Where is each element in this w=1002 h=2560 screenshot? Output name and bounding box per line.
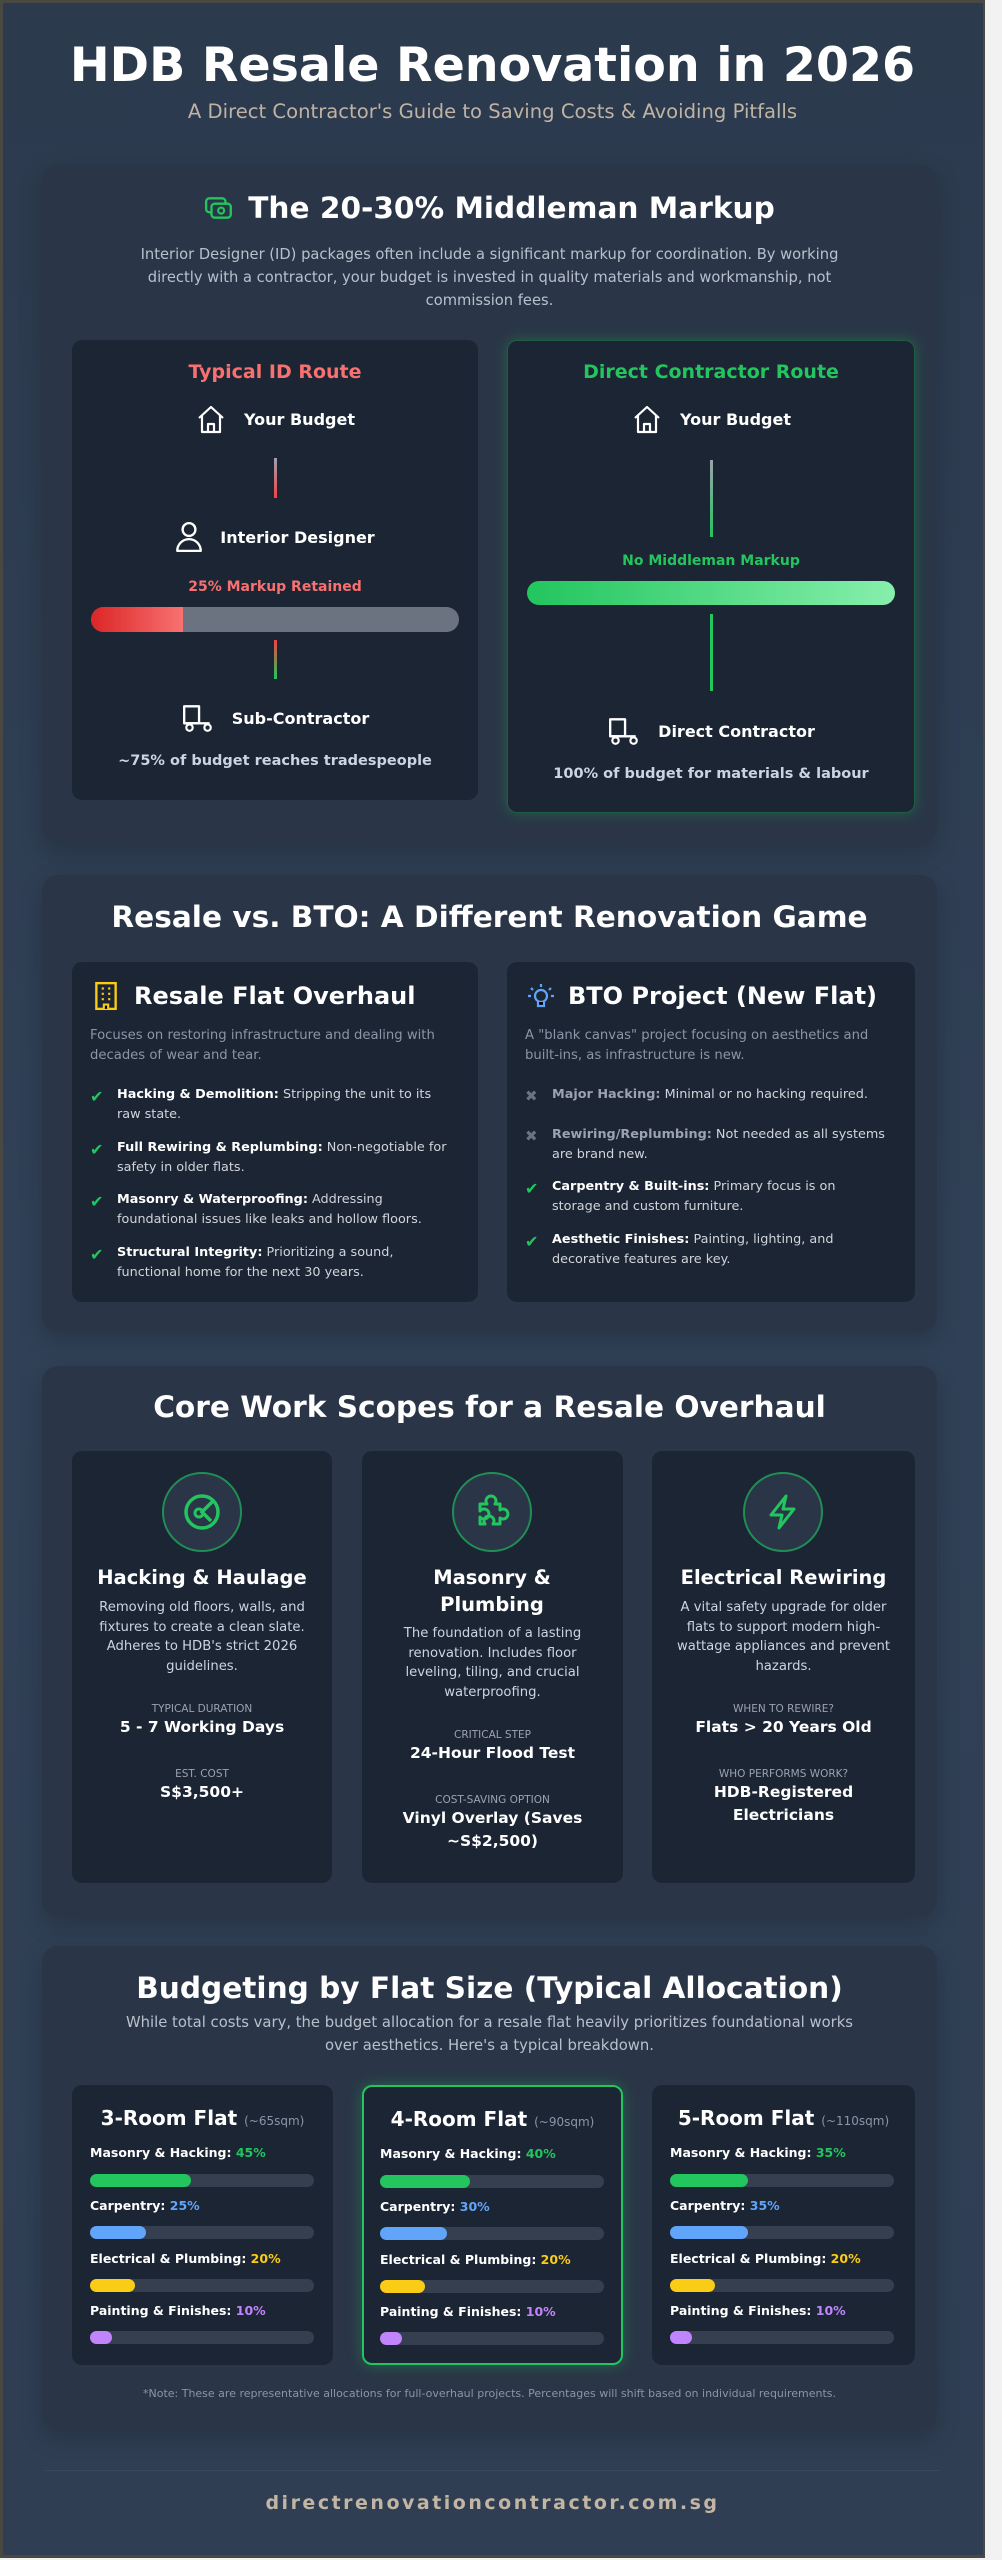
card: resale flat overhaul: ✔ — [90, 1087, 103, 1106]
item: Hacking & Demolition: Stripping the unit to its raw state. — [117, 1087, 431, 1122]
item: Full Rewiring & Replumbing: Non-negotiable for safety in older flats. — [117, 1140, 446, 1174]
stat: when: WHEN TO REWIRE? — [733, 1703, 834, 1715]
card title: Typical ID Route — [188, 361, 362, 383]
arrow line — [710, 614, 713, 691]
description: Interior Designer (ID) packages often include a significant markup for coordination. By working directly with a contractor, your budget is invested in quality materials and workmanship, not commission fees. — [141, 246, 838, 309]
note: 100% of budget for materials & labour — [553, 766, 869, 782]
card: BTO project: ✖ — [525, 1087, 538, 1105]
node: your budget: Your Budget — [244, 410, 355, 428]
node: direct contractor: Direct Contractor — [658, 722, 815, 740]
footer: directrenovationcontractor.com.sg — [265, 2492, 720, 2514]
node: your budget — [198, 406, 355, 434]
card heading: Hacking & Haulage — [97, 1566, 307, 1589]
item: Rewiring/Replumbing: Not needed as all systems are brand new. — [552, 1127, 885, 1162]
heading: Core Work Scopes for a Resale Overhaul — [153, 1390, 826, 1424]
stat: when: Flats > 20 Years Old — [695, 1718, 872, 1736]
full bar — [527, 581, 895, 605]
stat: cost-saving: COST-SAVING OPTION — [435, 1794, 550, 1806]
card title: 5-Room Flat (~110sqm) — [678, 2106, 889, 2130]
bar: electrical: Electrical & Plumbing: 20% — [670, 2251, 861, 2266]
arrow line — [710, 460, 713, 537]
stat: cost-saving: Vinyl Overlay (Saves ~S$2,500) — [403, 1809, 582, 1850]
description: While total costs vary, the budget allocation for a resale flat heavily prioritizes foundational works over aesthetics. Here's a typical breakdown. — [126, 2014, 853, 2054]
card: resale flat overhaul: ✔ — [90, 1192, 103, 1211]
stat: critical step: CRITICAL STEP — [454, 1729, 531, 1741]
node: direct contractor — [609, 718, 815, 745]
card: direct contractor route — [507, 340, 915, 813]
panel: budgeting by flat size — [42, 1946, 937, 2430]
node: sub-contractor: Sub-Contractor — [232, 708, 369, 728]
card description: The foundation of a lasting renovation. Includes floor leveling, tiling, and crucial waterproofing. — [404, 1626, 581, 1700]
subtitle: A Direct Contractor's Guide to Saving Costs & Avoiding Pitfalls — [188, 100, 797, 123]
panel: resale vs BTO — [42, 875, 937, 1332]
card: resale flat overhaul — [72, 962, 478, 1302]
bar: masonry: Masonry & Hacking: 35% — [670, 2145, 846, 2160]
card: BTO project: ✔ — [525, 1179, 538, 1198]
stat: duration — [120, 1703, 284, 1736]
stat: who: WHO PERFORMS WORK? — [719, 1768, 848, 1780]
card title: 4-Room Flat (~90sqm) — [391, 2107, 594, 2131]
card heading: Resale Flat Overhaul — [134, 982, 416, 1010]
item: Aesthetic Finishes: Painting, lighting, and decorative features are key. — [552, 1232, 833, 1266]
bar: electrical: Electrical & Plumbing: 20% — [90, 2251, 281, 2266]
bar: carpentry: Carpentry: 30% — [380, 2199, 490, 2214]
bar: painting: Painting & Finishes: 10% — [380, 2304, 556, 2319]
bar: carpentry: Carpentry: 25% — [90, 2198, 200, 2213]
icon: hacking — [162, 1472, 242, 1552]
card: 3-room — [72, 2085, 333, 2365]
icon: lightning — [743, 1472, 823, 1552]
stat: cost — [160, 1768, 244, 1801]
bar: electrical: Electrical & Plumbing: 20% — [380, 2252, 571, 2267]
bar: masonry: Masonry & Hacking: 40% — [380, 2146, 556, 2161]
card: 4-room (highlighted) — [362, 2085, 623, 2365]
heading: Resale vs. BTO: A Different Renovation Game — [111, 900, 868, 934]
stat: when — [695, 1703, 872, 1736]
card: BTO project — [507, 962, 915, 1302]
bar: masonry: Masonry & Hacking: 45% — [90, 2145, 266, 2160]
arrow line — [274, 640, 277, 679]
card: BTO project: ✔ — [525, 1232, 538, 1251]
card title: 3-Room Flat (~65sqm) — [101, 2106, 304, 2130]
card description: A vital safety upgrade for older flats to support modern high-wattage appliances and prevent hazards. — [677, 1600, 890, 1674]
panel: core work scopes — [42, 1366, 937, 1917]
card heading: Masonry & Plumbing — [433, 1566, 551, 1616]
note: ~75% of budget reaches tradespeople — [118, 753, 432, 769]
stat: who: HDB-Registered Electricians — [714, 1783, 853, 1824]
stat: critical step — [410, 1729, 575, 1762]
stat: cost: S$3,500+ — [160, 1783, 244, 1801]
item: Carpentry & Built-ins: Primary focus is on storage and custom furniture. — [552, 1179, 835, 1214]
item: Structural Integrity: Prioritizing a sound, functional home for the next 30 years. — [117, 1245, 393, 1280]
node: interior designer: Interior Designer — [220, 528, 375, 546]
markup label: 25% Markup Retained — [188, 579, 362, 595]
card: BTO project: ✖ — [525, 1127, 538, 1145]
heading: middleman markup: The 20-30% Middleman Markup — [248, 191, 775, 225]
node: interior designer — [176, 522, 375, 552]
icon: puzzle — [452, 1472, 532, 1552]
card: electrical rewiring — [652, 1451, 915, 1883]
bar: carpentry: Carpentry: 35% — [670, 2198, 780, 2213]
node: your budget — [634, 406, 791, 434]
card heading: BTO Project (New Flat) — [568, 982, 877, 1010]
stat: cost: EST. COST — [175, 1768, 229, 1780]
card description: Focuses on restoring infrastructure and dealing with decades of wear and tear. — [90, 1028, 435, 1063]
arrow line — [274, 458, 277, 498]
footnote: *Note: These are representative allocations for full-overhaul projects. Percentages will shift based on individual requirements. — [143, 2387, 836, 2400]
card description: Removing old floors, walls, and fixtures to create a clean slate. Adheres to HDB's strict 2026 guidelines. — [99, 1600, 305, 1674]
bar: painting: Painting & Finishes: 10% — [90, 2303, 266, 2318]
card: resale flat overhaul: ✔ — [90, 1245, 103, 1264]
card description: A "blank canvas" project focusing on aesthetics and built-ins, as infrastructure is new. — [525, 1028, 868, 1063]
node: your budget: Your Budget — [680, 410, 791, 428]
card: resale flat overhaul: ✔ — [90, 1140, 103, 1159]
card: masonry & plumbing — [362, 1451, 623, 1883]
card: 5-room — [652, 2085, 915, 2365]
node: sub-contractor — [183, 705, 370, 732]
panel: middleman markup — [42, 165, 937, 844]
card heading: Electrical Rewiring — [681, 1566, 886, 1589]
stat: duration: 5 - 7 Working Days — [120, 1718, 284, 1736]
title: HDB Resale Renovation in 2026 — [70, 38, 915, 93]
heading: Budgeting by Flat Size (Typical Allocation) — [136, 1971, 843, 2005]
no markup label: No Middleman Markup — [622, 553, 800, 569]
item: Masonry & Waterproofing: Addressing foundational issues like leaks and hollow floors. — [117, 1192, 422, 1226]
stat: duration: TYPICAL DURATION — [152, 1703, 252, 1715]
item: Major Hacking: Minimal or no hacking required. — [552, 1087, 868, 1102]
markup bar — [91, 607, 459, 632]
card title: Direct Contractor Route — [583, 361, 839, 383]
card: typical ID route — [72, 340, 478, 800]
stat: critical step: 24-Hour Flood Test — [410, 1744, 575, 1762]
bar: painting: Painting & Finishes: 10% — [670, 2303, 846, 2318]
card: hacking & haulage — [72, 1451, 332, 1883]
